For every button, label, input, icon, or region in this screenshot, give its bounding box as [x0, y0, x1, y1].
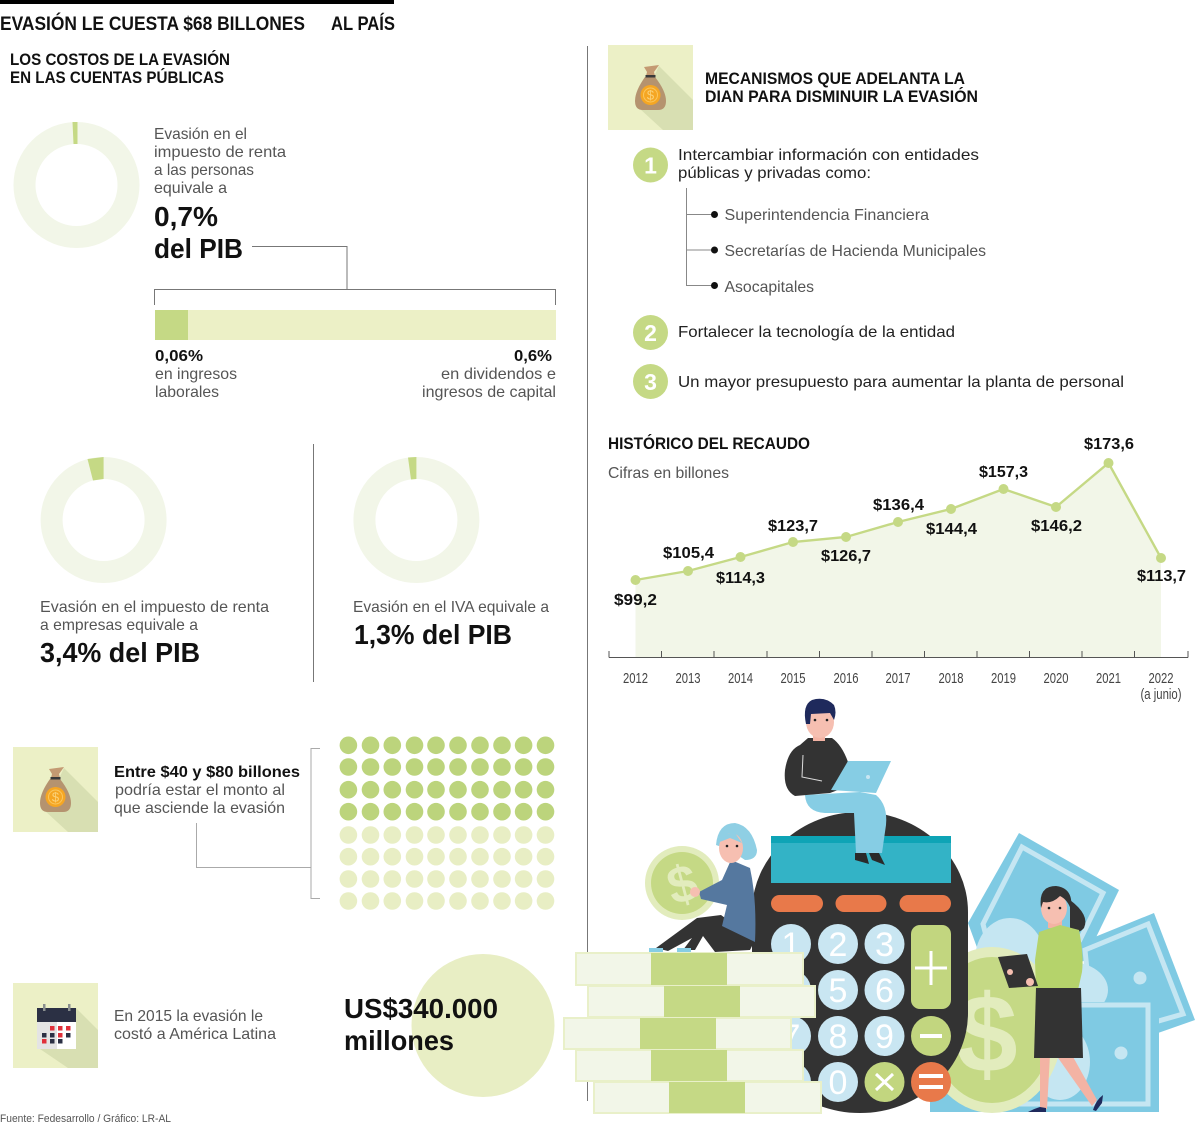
calculator: 6 [875, 972, 894, 1010]
title: EVASIÓN LE CUESTA $68 BILLONES [0, 13, 305, 35]
callout: US$340.000 millones: millones [344, 1025, 454, 1056]
line chart: recaudo: 2016 [834, 670, 858, 687]
text block: entre 40 y 80 billones [114, 764, 300, 817]
text block: entre 40 y 80 billones: Entre $40 y $80 billones [114, 764, 300, 781]
title [0, 0, 395, 35]
calculator: 0 [829, 1064, 847, 1102]
sublist: entidades: Asocapitales [724, 279, 814, 296]
text block: entre 40 y 80 billones: podría estar el monto al [115, 782, 285, 799]
icon: calendar [13, 983, 98, 1068]
line chart: recaudo: 2021 [1096, 670, 1121, 687]
icon: money bag mecanismos: $ [647, 88, 655, 102]
calculator: 1 [782, 926, 800, 964]
label: 0,6%: ingresos de capital [422, 384, 556, 401]
line chart: recaudo: $113,7 [1137, 568, 1186, 585]
text block: IVA: Evasión en el IVA equivale a [353, 599, 549, 616]
line chart: recaudo: $99,2 [614, 592, 657, 609]
line chart: recaudo [609, 436, 1188, 703]
callout: US$340.000 millones [344, 954, 554, 1097]
label: 0,6% [422, 348, 556, 401]
text block: renta personas: Evasión en el [154, 126, 247, 143]
line chart: recaudo: $144,4 [926, 521, 977, 538]
donut chart: renta empresas 3,4% [52, 457, 156, 572]
heading: mecanismos [705, 69, 978, 106]
calculator: 2 [829, 926, 847, 964]
text block: América Latina [114, 1008, 276, 1043]
list item 1 [633, 147, 979, 182]
illustration: calculator and people [564, 699, 1195, 1113]
calculator: 9 [875, 1018, 894, 1056]
calculator: 3 [875, 926, 894, 964]
line chart: recaudo: $114,3 [716, 570, 765, 587]
line chart: recaudo: 2018 [938, 670, 964, 687]
heading: histórico del recaudo: HISTÓRICO DEL RECAUDO [608, 434, 810, 453]
line chart: recaudo: (a junio) [1140, 686, 1182, 703]
callout: US$340.000 millones: US$340.000 [344, 993, 498, 1024]
line chart: recaudo: $123,7 [768, 518, 818, 535]
title: AL PAÍS [331, 13, 395, 35]
big coin [922, 947, 1062, 1113]
blue banknotes [930, 833, 1195, 1112]
donut chart: IVA 1,3% [364, 457, 468, 572]
heading: costos de la evasión: LOS COSTOS DE LA EVASIÓN [10, 50, 230, 69]
line chart: recaudo: 2017 [886, 670, 910, 687]
calculator [752, 812, 968, 1113]
heading: mecanismos: MECANISMOS QUE ADELANTA LA [705, 69, 965, 88]
text block: renta personas: impuesto de renta [154, 144, 286, 161]
list item 3: 3 [644, 369, 657, 395]
label: 0,06%: en ingresos [155, 366, 237, 383]
text block: renta empresas: 3,4% del PIB [40, 637, 200, 668]
donut chart: renta personas 0,7% [24, 122, 128, 237]
list item 3 [633, 364, 1124, 399]
text block: renta personas: equivale a [154, 180, 227, 197]
text block: América Latina: En 2015 la evasión le [114, 1008, 263, 1025]
stack of bills [564, 953, 821, 1113]
line chart: recaudo: 2012 [623, 670, 648, 687]
text block: renta empresas [40, 599, 269, 668]
dot matrix: 40 of 80 billones [340, 736, 554, 910]
text block: renta personas: a las personas [154, 162, 254, 179]
icon: money bag mecanismos [608, 45, 693, 130]
line chart: recaudo: 2022 [1148, 670, 1174, 687]
text block: renta personas: del PIB [154, 233, 243, 264]
calculator: 7 [782, 1018, 800, 1056]
heading: costos de la evasión [10, 50, 230, 87]
standing woman with tablet [998, 886, 1103, 1112]
line chart: recaudo: $146,2 [1031, 518, 1082, 535]
seated woman with coin: $ [661, 853, 704, 917]
line chart: recaudo: 2020 [1044, 670, 1068, 687]
list item 1: 1 [644, 152, 657, 178]
calculator: 8 [829, 1018, 847, 1056]
line chart: recaudo: $173,6 [1084, 436, 1134, 453]
man with laptop [785, 699, 891, 865]
sublist: entidades: Secretarías de Hacienda Municipales [724, 243, 986, 260]
text block: renta personas: 0,7% [154, 201, 218, 232]
line chart: recaudo: 2015 [780, 670, 806, 687]
connector: bracket to dots [196, 748, 320, 898]
text block: renta empresas: Evasión en el impuesto de renta [40, 599, 269, 616]
text block: IVA: 1,3% del PIB [354, 619, 512, 650]
list item 2 [633, 315, 955, 350]
label: 0,06%: laborales [155, 384, 219, 401]
list item 1: Intercambiar información con entidades [678, 147, 979, 164]
seated woman with coin [645, 823, 757, 952]
heading: histórico del recaudo: Cifras en billones [608, 465, 729, 482]
label: 0,06% [155, 348, 237, 401]
sublist: entidades: Superintendencia Financiera [724, 207, 929, 224]
line chart: recaudo: $157,3 [979, 464, 1028, 481]
list item 2: Fortalecer la tecnología de la entidad [678, 324, 955, 341]
text block: América Latina: costó a América Latina [114, 1026, 276, 1043]
heading: histórico del recaudo [608, 434, 810, 482]
list item 1: públicas y privadas como: [678, 165, 871, 182]
stacked bar: desglose renta personas [155, 310, 556, 340]
label: 0,6%: 0,6% [514, 348, 552, 365]
calculator: 5 [829, 972, 847, 1010]
line chart: recaudo: $105,4 [663, 545, 714, 562]
line chart: recaudo: 2013 [676, 670, 700, 687]
text block: renta empresas: a empresas equivale a [40, 617, 198, 634]
line chart: recaudo: $136,4 [873, 497, 924, 514]
line chart: recaudo: $126,7 [821, 548, 871, 565]
list item 3: Un mayor presupuesto para aumentar la planta de personal [678, 374, 1124, 391]
line chart: recaudo: 2014 [728, 670, 753, 687]
heading: mecanismos: DIAN PARA DISMINUIR LA EVASIÓN [705, 87, 978, 106]
sublist: entidades [686, 188, 986, 296]
text block: renta personas [154, 126, 286, 264]
line chart: recaudo: 2019 [991, 670, 1016, 687]
icon: money bag [13, 747, 98, 832]
icon: money bag: $ [52, 790, 60, 804]
big coin: $ [956, 973, 1018, 1096]
label: 0,06%: 0,06% [155, 348, 203, 365]
heading: costos de la evasión: EN LAS CUENTAS PÚBLICAS [10, 68, 224, 87]
list item 2: 2 [644, 320, 657, 346]
text block: entre 40 y 80 billones: que asciende la evasión [114, 800, 285, 817]
label: 0,6%: en dividendos e [441, 366, 556, 383]
connector: del PIB to bar [154, 246, 556, 305]
text block: IVA [353, 599, 549, 650]
